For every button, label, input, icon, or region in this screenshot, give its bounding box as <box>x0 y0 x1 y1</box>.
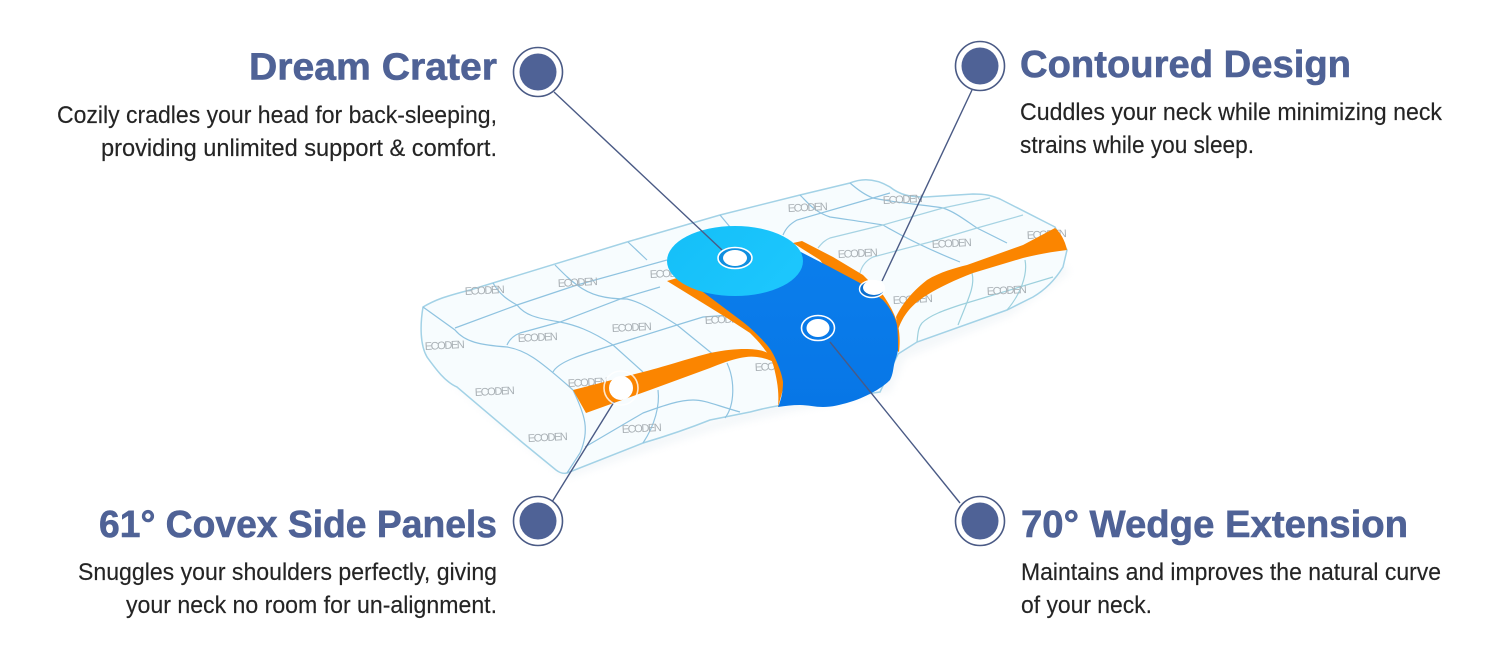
text: Contoured Design description: Cuddles your neck while minimizing neck <box>1020 99 1443 126</box>
marker: wedge <box>802 316 834 340</box>
leader lines <box>552 90 972 503</box>
text: Dream Crater description: Cozily cradles your head for back-sleeping, <box>57 102 497 129</box>
text: Dream Crater description: providing unlimited support & comfort. <box>101 135 497 162</box>
heading: Contoured Design: Contoured Design <box>1020 44 1351 86</box>
marker: side panel <box>604 371 638 405</box>
orange left side panel <box>573 349 778 413</box>
ECODEN watermarks: ECODEN <box>568 376 608 390</box>
pillow seam lines <box>423 183 1053 473</box>
text: side panels description <box>78 559 497 619</box>
icon: contoured design dot <box>956 42 1004 90</box>
heading: 61° Covex Side Panels: 61° Covex Side Panels <box>99 504 497 546</box>
ECODEN watermarks: ECODEN <box>558 276 598 290</box>
ECODEN watermarks: ECODEN <box>705 313 745 327</box>
marker: crater <box>718 248 752 268</box>
orange right side panel <box>896 228 1067 330</box>
ECODEN watermarks: ECODEN <box>475 385 515 399</box>
pillow body outline <box>421 180 1067 473</box>
ECODEN watermarks: ECODEN <box>650 267 690 281</box>
text: wedge extension description: Maintains and improves the natural curve <box>1021 559 1441 586</box>
ECODEN watermarks: ECODEN <box>987 284 1027 298</box>
text: wedge extension description <box>1021 559 1441 619</box>
ECODEN watermarks: ECODEN <box>788 201 828 215</box>
ECODEN watermarks: ECODEN <box>528 431 568 445</box>
heading: 70° Wedge Extension: 70° Wedge Extension <box>1021 504 1408 546</box>
ECODEN watermarks: ECODEN <box>612 321 652 335</box>
text: wedge extension description: of your neck. <box>1021 592 1152 619</box>
text: Contoured Design description <box>1020 99 1443 159</box>
icon: dream crater dot <box>514 48 562 96</box>
ECODEN watermarks: ECODEN <box>425 339 465 353</box>
orange upper wedge edges <box>667 278 785 407</box>
callout: Dream Crater <box>57 46 562 162</box>
text: side panels description: your neck no room for un-alignment. <box>126 592 497 619</box>
dream crater disc <box>667 226 803 296</box>
ECODEN watermarks: ECODEN <box>883 193 923 207</box>
callout: Contoured Design <box>956 42 1443 159</box>
callout: 70° Wedge Extension <box>956 496 1441 619</box>
text: side panels description: Snuggles your shoulders perfectly, giving <box>78 559 497 586</box>
pillow illustration <box>421 90 1070 503</box>
icon: side panels dot <box>514 496 562 546</box>
ECODEN watermarks: ECODEN <box>465 284 505 298</box>
ECODEN watermarks: ECODEN <box>1027 228 1067 242</box>
icon: wedge extension dot <box>956 496 1004 546</box>
marker: contour <box>860 280 885 298</box>
ECODEN watermarks: ECODEN <box>838 247 878 261</box>
pillow shadow <box>430 262 1070 478</box>
ECODEN watermarks: ECODEN <box>932 237 972 251</box>
ECODEN watermarks: ECODEN <box>518 331 558 345</box>
ECODEN watermarks: ECODEN <box>622 422 662 436</box>
blue wedge extension <box>690 250 898 407</box>
callout: 61° Covex Side Panels <box>78 496 562 619</box>
ECODEN watermarks <box>425 193 1067 445</box>
text: Contoured Design description: strains while you sleep. <box>1020 132 1254 159</box>
ECODEN watermarks: ECODEN <box>893 293 933 307</box>
heading: Dream Crater: Dream Crater <box>249 46 497 88</box>
ECODEN watermarks: ECODEN <box>755 360 795 374</box>
text: Dream Crater description <box>57 102 497 162</box>
